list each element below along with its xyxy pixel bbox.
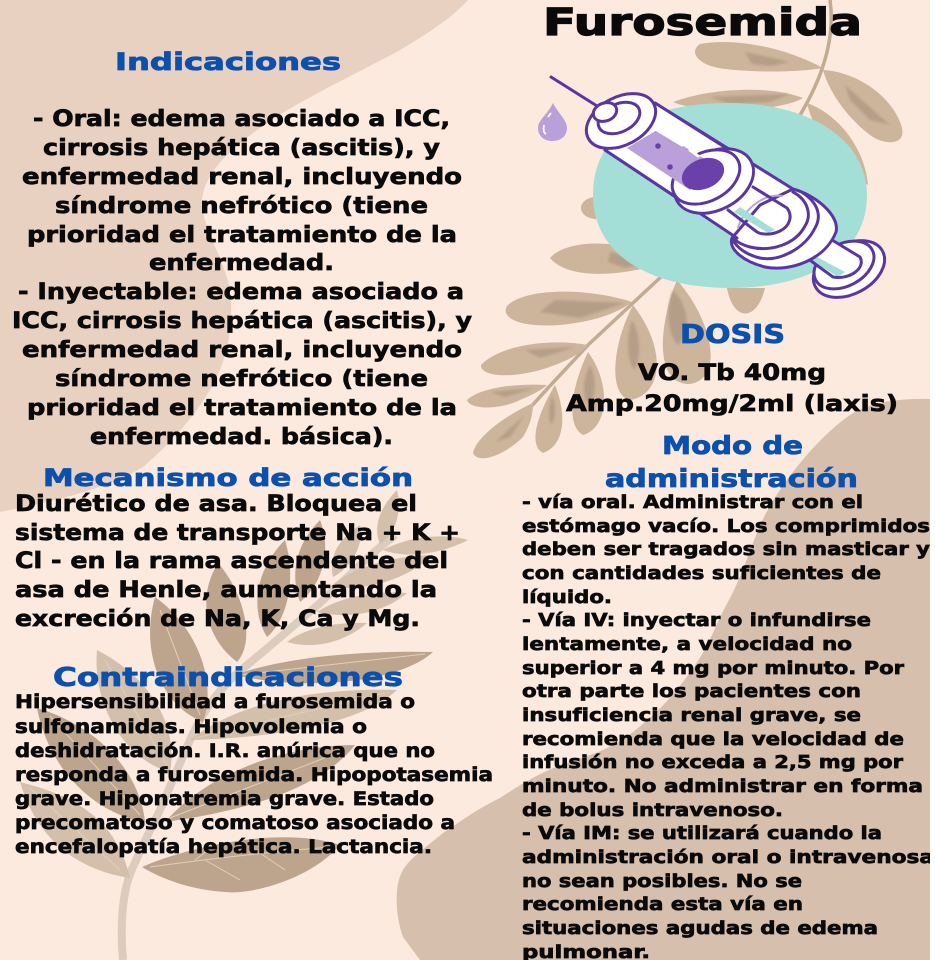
text block: modo de administración: administración oral o intravenosa (522, 847, 934, 868)
text block: indicaciones: enfermedad. (149, 251, 334, 276)
icon: syringe (551, 77, 894, 309)
title: Furosemida (543, 1, 862, 44)
text block: modo de administración: - vía oral. Administrar con el (522, 492, 863, 513)
collar rings (731, 189, 836, 268)
illustration: teal circle (593, 103, 867, 288)
text block: indicaciones: síndrome nefrótico (tiene (55, 194, 428, 219)
heading: Modo de administración: Modo de (662, 431, 803, 460)
text block: mecanismo: Diurético de asa. Bloquea el (15, 492, 417, 517)
heading: Indicaciones: Indicaciones (115, 48, 341, 76)
text block: modo de administración: infusión no exceda a 2,5 mg por (522, 752, 903, 773)
text block: modo de administración: estómago vacío. Los comprimidos (522, 516, 930, 537)
text block: modo de administración: no sean posibles. No se (522, 871, 802, 892)
botanical branch: top right (467, 0, 902, 458)
rear rod (817, 242, 839, 260)
text block: modo de administración: insuficiencia renal grave, se (522, 705, 861, 726)
text block: mecanismo: Cl - en la rama ascendente del (15, 549, 448, 574)
text block: modo de administración: - Vía IM: se utilizará cuando la (522, 823, 882, 844)
text block: mecanismo: sistema de transporte Na + K + (15, 521, 460, 546)
text block: modo de administración: situaciones agudas de edema (522, 918, 878, 939)
text block: contraindicaciones: responda a furosemida. Hipopotasemia (15, 765, 493, 786)
barrel front cap (584, 92, 658, 150)
text block: indicaciones: prioridad el tratamiento de la (27, 396, 457, 421)
text block: modo de administración: recomienda esta vía en (522, 894, 803, 915)
text block: contraindicaciones: sulfonamidas. Hipovolemia o (15, 717, 367, 738)
text block: modo de administración: con cantidades suficientes de (522, 563, 881, 584)
text block: dosis (566, 361, 898, 417)
text block: mecanismo (15, 492, 460, 632)
text block: indicaciones: ICC, cirrosis hepática (ascitis), y (12, 309, 472, 334)
leaf mottling (490, 52, 890, 442)
heading: Modo de administración: administración (605, 464, 858, 493)
botanical branch: lower left (20, 490, 468, 960)
background blob: top left (0, 0, 468, 512)
text block: modo de administración: deben ser tragados sin masticar y (522, 539, 930, 560)
plunger rod (734, 207, 775, 233)
heading: Contraindicaciones: Contraindicaciones (53, 663, 403, 693)
text block: modo de administración: - Vía IV: inyectar o infundirse (522, 610, 871, 631)
dark plunger ellipse (682, 158, 724, 190)
text block: modo de administración: lentamente, a velocidad no (522, 634, 852, 655)
heading: DOSIS: DOSIS (680, 320, 785, 350)
flange (674, 147, 755, 215)
text block: indicaciones: síndrome nefrótico (tiene (55, 367, 428, 392)
text block: indicaciones: - Oral: edema asociado a ICC, (33, 107, 450, 132)
text block: contraindicaciones: encefalopatía hepática. Lactancia. (15, 837, 432, 858)
text block: dosis: VO. Tb 40mg (638, 361, 826, 386)
text block: indicaciones: enfermedad renal, incluyendo (22, 165, 462, 190)
text block: indicaciones (12, 107, 472, 450)
text block: contraindicaciones: deshidratación. I.R. anúrica que no (15, 741, 435, 762)
text block: contraindicaciones: precomatoso y comatoso asociado a (15, 813, 455, 834)
text block: modo de administración: otra parte los pacientes con (522, 681, 861, 702)
text block: indicaciones: cirrosis hepática (ascitis), y (43, 136, 440, 161)
text block: modo de administración (522, 492, 934, 963)
text block: dosis: Amp.20mg/2ml (laxis) (566, 392, 898, 417)
text block: contraindicaciones: Hipersensibilidad a furosemida o (15, 692, 415, 713)
text block: modo de administración: de bolus intravenoso. (522, 800, 783, 821)
text block: indicaciones: enfermedad. básica). (90, 425, 393, 450)
text block: indicaciones: prioridad el tratamiento de la (27, 223, 457, 248)
end cap (812, 239, 886, 299)
text block: mecanismo: excreción de Na, K, Ca y Mg. (15, 607, 420, 632)
needle (549, 75, 598, 106)
text block: contraindicaciones: grave. Hiponatremia grave. Estado (15, 789, 434, 810)
text block: mecanismo: asa de Henle, aumentando la (15, 578, 437, 603)
liquid (627, 130, 708, 190)
background blob: bottom right (397, 399, 930, 960)
barrel body (605, 103, 793, 238)
text block: modo de administración: recomienda que la velocidad de (522, 729, 904, 750)
text block: indicaciones: enfermedad renal, incluyendo (22, 338, 462, 363)
heading: Mecanismo de acción: Mecanismo de acción (43, 464, 413, 492)
icon: purple drop (538, 103, 567, 141)
heading: Modo de administración (606, 434, 856, 488)
text block: modo de administración: pulmonar. (522, 942, 650, 963)
text block: modo de administración: líquido. (522, 587, 612, 608)
text block: modo de administración: minuto. No administrar en forma (522, 776, 923, 797)
text block: contraindicaciones (15, 692, 493, 858)
plunger barrel (704, 166, 790, 234)
text block: modo de administración: superior a 4 mg por minuto. Por (522, 658, 904, 679)
text block: indicaciones: - Inyectable: edema asociado a (18, 280, 464, 305)
